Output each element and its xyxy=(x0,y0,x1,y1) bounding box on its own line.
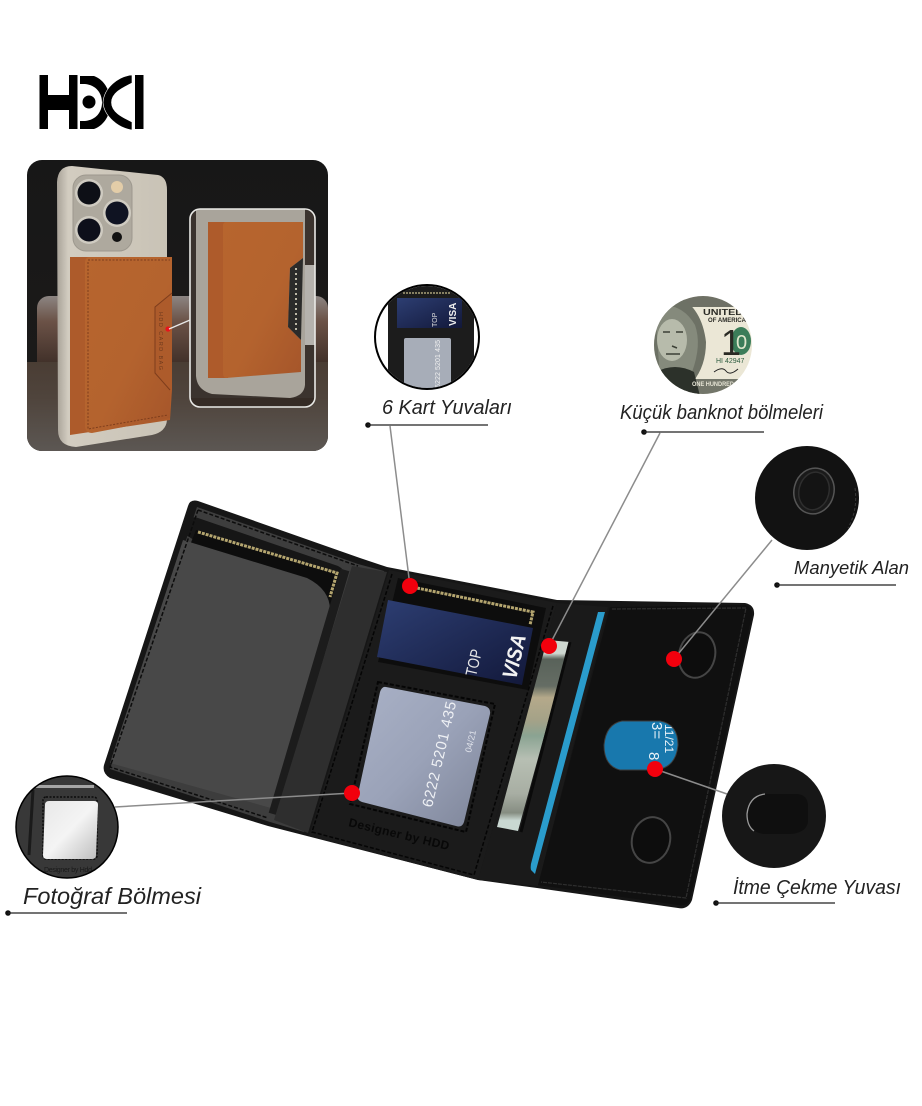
bill serial: HI 42947 xyxy=(716,358,745,365)
upper magnet ring xyxy=(674,628,720,682)
mini card brand: VISA xyxy=(448,303,459,326)
inset phone back xyxy=(196,209,305,398)
bill seal digit: 0 xyxy=(736,332,747,354)
embossed maker text: Designer by HDD xyxy=(347,815,451,853)
slot outline xyxy=(604,721,678,770)
ID window xyxy=(358,687,490,826)
inset wallet flap xyxy=(223,222,303,378)
bill green seal xyxy=(731,327,751,355)
gold card edge xyxy=(417,588,533,625)
circle outline: photo pocket xyxy=(16,776,118,878)
inset: wallet detail xyxy=(190,209,315,407)
label: card slots xyxy=(365,397,512,428)
bill portrait oval xyxy=(654,300,706,390)
magnet circle stitches xyxy=(848,488,856,528)
label text: Küçük banknot bölmeleri xyxy=(620,402,824,424)
frame side seam xyxy=(29,790,33,855)
photo window stitching xyxy=(43,797,97,859)
logo: HDDI mark xyxy=(40,75,144,130)
left panel inner xyxy=(110,507,384,832)
middle panel xyxy=(309,570,557,880)
blue card edge xyxy=(531,612,605,874)
card label: TOP xyxy=(463,648,486,678)
inset highlight strip xyxy=(305,265,314,345)
label: magnetic area xyxy=(774,558,909,588)
middle panel stitching xyxy=(312,574,553,875)
wallet outer shell xyxy=(104,501,754,908)
bill numeral 1: 1 xyxy=(721,322,741,363)
detail circle: push-pull slot xyxy=(722,764,826,868)
slot highlight xyxy=(747,794,765,831)
portrait coat xyxy=(656,367,700,396)
pocket edge shadow xyxy=(273,570,345,814)
callout dot xyxy=(165,326,171,332)
inset frame xyxy=(190,209,315,407)
magnet inner ring xyxy=(795,469,833,513)
slot card text: 11/21 xyxy=(662,724,676,753)
detail circle: banknote xyxy=(652,294,754,396)
label text: 6 Kart Yuvaları xyxy=(382,397,512,419)
inset card dots xyxy=(295,268,297,330)
camera lenses xyxy=(75,179,131,244)
bill denomination: ONE HUNDRED xyxy=(692,381,734,388)
camera bump xyxy=(73,175,132,251)
background roller xyxy=(37,296,328,362)
bill signature xyxy=(714,369,738,373)
fold hinge xyxy=(274,566,387,833)
label rule xyxy=(774,582,896,588)
portrait eyes xyxy=(663,332,683,354)
leader lines xyxy=(115,426,772,807)
label rule xyxy=(5,910,127,916)
detail circle: card slots xyxy=(375,285,479,392)
gold card border xyxy=(198,532,337,597)
right panel xyxy=(538,605,752,905)
portrait hair xyxy=(655,306,698,378)
right panel stitching xyxy=(541,608,746,898)
left gray pocket xyxy=(110,540,330,808)
label text: İtme Çekme Yuvası xyxy=(733,877,901,899)
tan wallet flap xyxy=(85,257,172,433)
ID card number: 6222 5201 435 xyxy=(419,700,460,809)
magnet outer ring xyxy=(789,464,839,518)
label: photo pocket xyxy=(5,883,202,916)
portrait face xyxy=(657,319,687,361)
mini blue card xyxy=(397,298,462,328)
inset table xyxy=(191,398,314,406)
slot recess xyxy=(747,794,808,834)
phone with wallet xyxy=(57,166,190,447)
bill subtitle: OF AMERICA xyxy=(708,317,746,324)
detail circle: photo pocket xyxy=(16,776,118,878)
bill top band xyxy=(680,296,734,307)
label rule xyxy=(713,900,835,906)
lower magnet ring xyxy=(627,813,675,867)
banknote strip xyxy=(497,640,570,831)
red marker dots xyxy=(344,578,682,801)
inset wallet body xyxy=(208,222,228,378)
label rule xyxy=(365,422,488,428)
mini ID number: 6222 5201 435 xyxy=(435,340,442,388)
card brand: VISA xyxy=(498,632,531,681)
mini gold edge xyxy=(403,292,450,294)
card recess xyxy=(186,517,344,625)
slot lower digits: 8 xyxy=(645,752,662,760)
banknote slot shadow xyxy=(521,642,570,832)
ID card date: 04/21 xyxy=(463,729,478,753)
blue VISA card xyxy=(377,600,533,685)
ID window stitching xyxy=(350,682,495,832)
label text: Manyetik Alan xyxy=(794,558,909,578)
left panel stitching xyxy=(110,510,358,818)
black card xyxy=(190,530,338,606)
bill bottom band xyxy=(688,379,738,394)
frame top band xyxy=(36,785,94,788)
card slot recess xyxy=(378,578,546,690)
embossed text: Designer by Hdd xyxy=(44,867,92,874)
slot card digits: 3= xyxy=(648,722,665,739)
mini ID window xyxy=(404,338,451,392)
detail circle: magnetic area xyxy=(755,446,859,550)
banknote section panel xyxy=(478,603,608,886)
tan wallet body xyxy=(70,257,172,435)
embossed wallet text: HDD CARD BAG xyxy=(157,312,163,370)
bill title: UNITED xyxy=(703,308,743,317)
phone body xyxy=(57,166,167,447)
inset card notch xyxy=(288,258,303,340)
label: push-pull slot xyxy=(713,877,901,906)
label rule xyxy=(641,429,764,435)
wallet stitching xyxy=(88,260,170,429)
photo window xyxy=(43,801,98,859)
panel: phone lifestyle photo xyxy=(27,160,328,451)
mini card label: TOP xyxy=(432,312,439,327)
product: open tri-fold wallet xyxy=(104,501,754,908)
flap notch edge xyxy=(155,293,172,390)
table surface xyxy=(27,362,328,451)
push-pull slot with card xyxy=(604,722,678,770)
callout line xyxy=(169,320,190,329)
label: banknote sections xyxy=(620,402,824,435)
label text: Fotoğraf Bölmesi xyxy=(23,883,202,909)
